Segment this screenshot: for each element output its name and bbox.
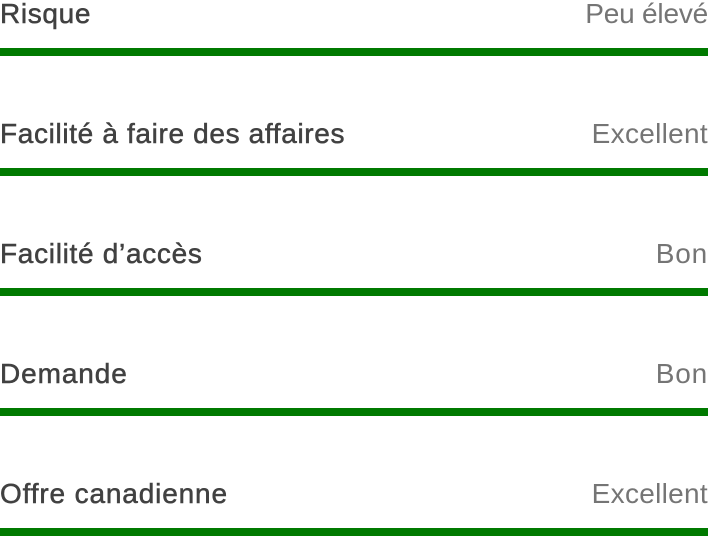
label: Facilité d’accès [0, 238, 203, 269]
value: Excellent [592, 118, 708, 149]
row: Risque [0, 0, 708, 56]
value: Bon [656, 238, 708, 269]
green bar [0, 48, 708, 56]
green bar [0, 528, 708, 536]
green bar [0, 408, 708, 416]
green bar [0, 288, 708, 296]
label: Facilité à faire des affaires [0, 118, 345, 149]
label: Offre canadienne [0, 478, 228, 509]
value: Excellent [592, 478, 708, 509]
green bar [0, 168, 708, 176]
row: Offre canadienne [0, 478, 708, 536]
value: Bon [656, 358, 708, 389]
row: Demande [0, 358, 708, 416]
row: Facilité à faire des affaires [0, 118, 708, 176]
label: Demande [0, 358, 128, 389]
row: Facilité d'accès [0, 238, 708, 296]
